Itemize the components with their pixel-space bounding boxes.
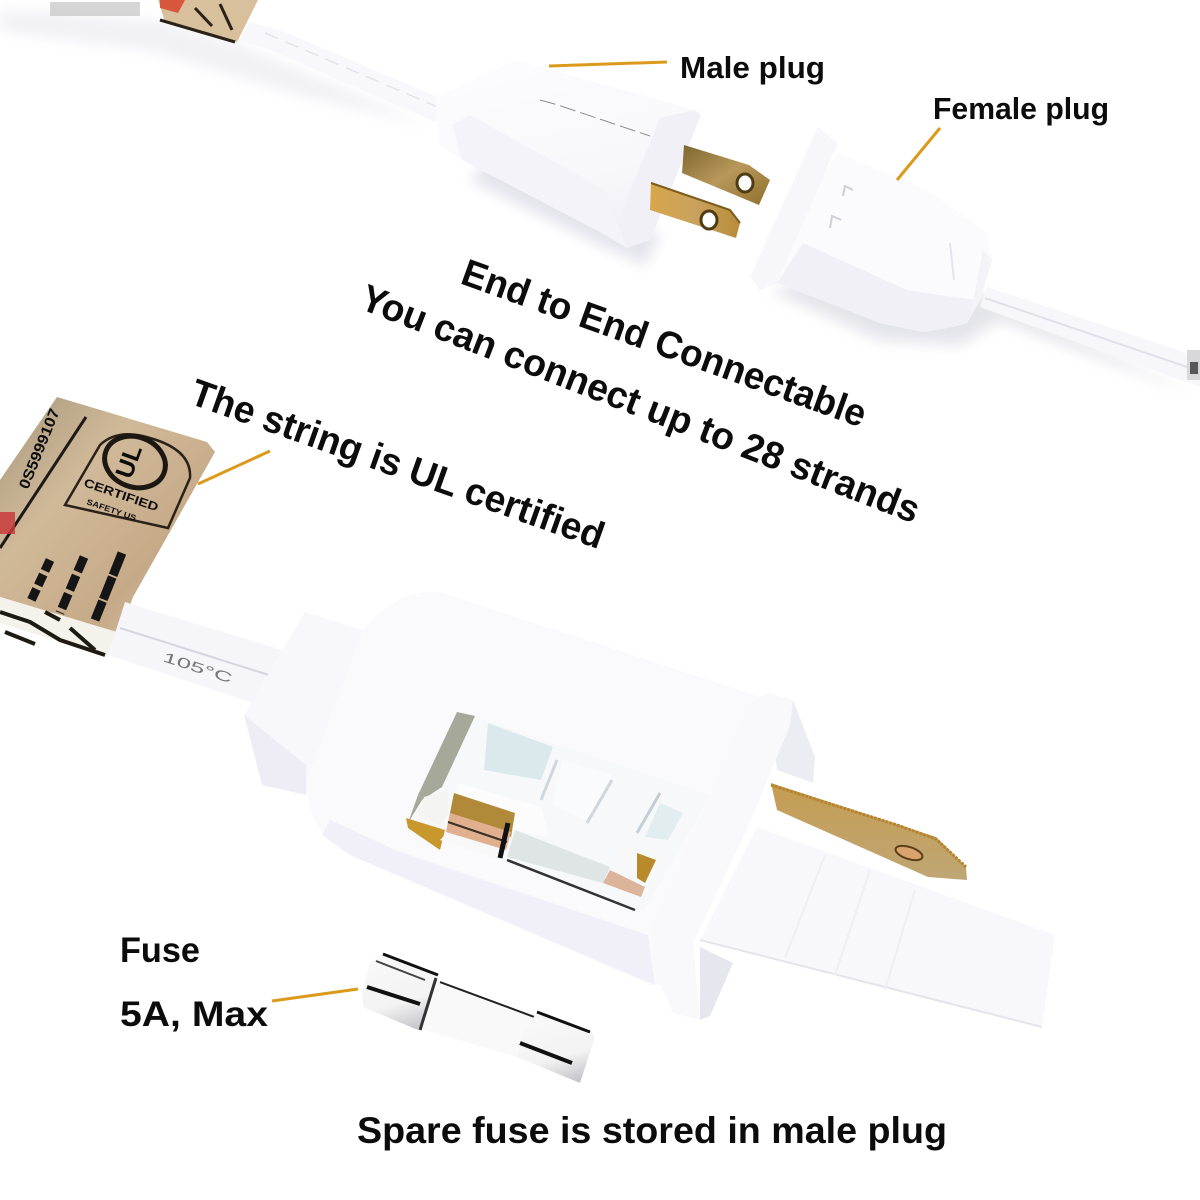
label: fuse rating: 5A, Max [120,995,269,1034]
main male plug with fuse compartment [244,592,1055,1027]
leader line: female plug [897,128,940,180]
plug blade [771,783,967,880]
leader line: UL label [198,451,270,484]
label: fuse: Fuse [120,931,200,970]
fuse window [406,712,710,910]
text: UL certified: The string is UL certified [185,372,610,558]
heading: end to end connectable: End to End Connectable [456,252,872,436]
fuse in holder [440,793,656,910]
rear of flange [767,693,815,783]
plug body [307,592,770,985]
label: female plug: Female plug [933,91,1109,126]
UL mark: CERTIFIED [82,476,161,514]
plug collar [244,612,366,795]
UL certified label: 0S5999107 [16,406,64,491]
bottom cord [108,602,282,706]
UL mark [65,428,190,528]
UL certified label [0,397,215,657]
caption: spare fuse: Spare fuse is stored in male plug [357,1110,947,1151]
top left cord and tag [0,0,445,125]
top blade [682,145,770,205]
female plug top [750,127,1200,395]
leader line: male plug [549,62,667,66]
UL mark: UL [110,441,148,482]
spare fuse [362,953,595,1083]
plastic tab [700,827,1055,1027]
male plug top [435,60,770,265]
leader line: fuse [272,989,358,1001]
bottom blade [650,183,740,238]
label: male plug: Male plug [680,50,825,85]
text: connect up to 28 strands: You can connect up to 28 strands [355,277,926,532]
bottom cord: 105°C [161,649,234,686]
flange [653,693,793,1020]
UL mark: SAFETY US [85,497,138,523]
